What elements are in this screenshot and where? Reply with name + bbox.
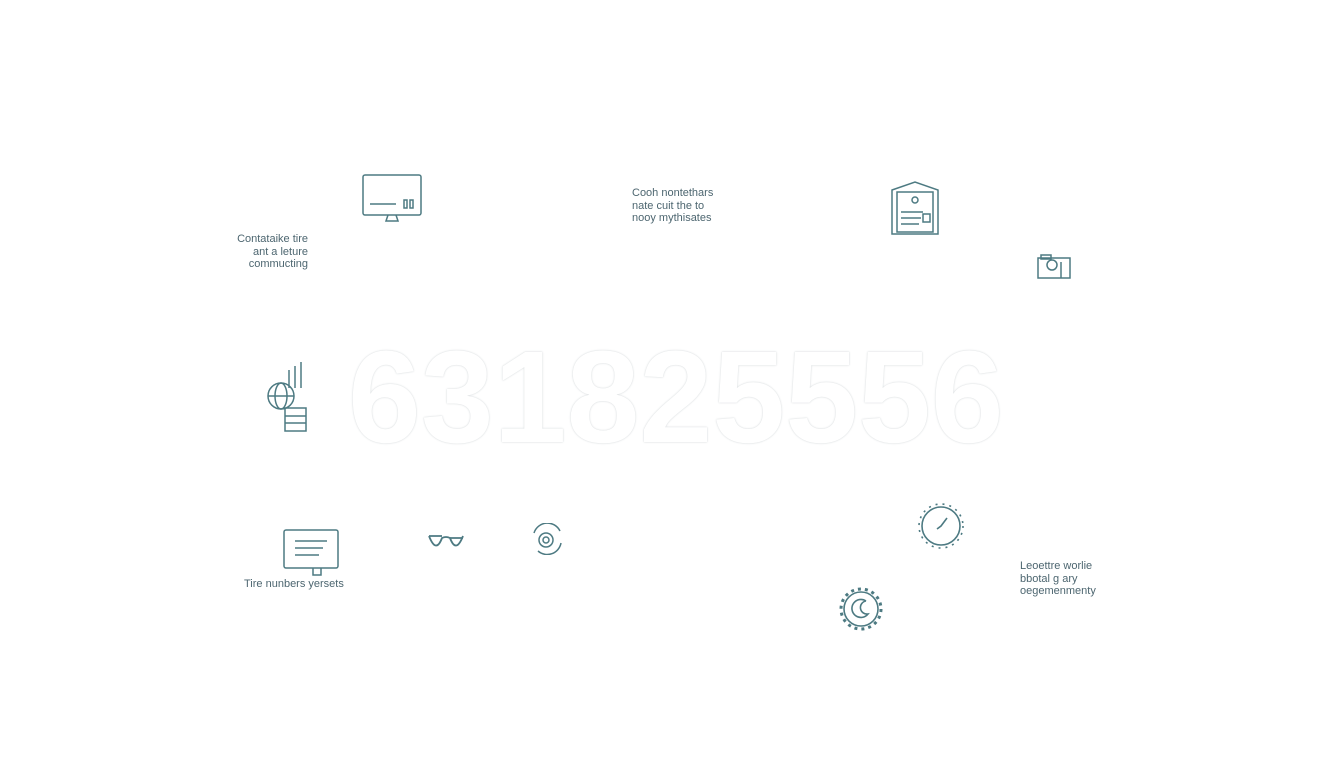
text: bottom left: Tire nunbers yersets <box>244 578 344 590</box>
icon: gear <box>840 588 882 630</box>
text: top center: nooy mythisates <box>632 212 711 224</box>
icon: globe with bars <box>267 362 307 432</box>
text: bottom right: Leoettre worlie <box>1020 560 1092 572</box>
icon: chat box <box>283 529 339 576</box>
icon: document <box>891 181 939 235</box>
text: top left <box>237 233 308 270</box>
text: top center: nate cuit the to <box>632 200 704 212</box>
big number: 631825556 <box>348 323 1004 470</box>
icon: small camera box <box>1037 254 1071 279</box>
text: top left: Contataike tire <box>237 233 308 245</box>
icon: clock <box>918 503 964 549</box>
text: top left: ant a leture <box>253 246 308 258</box>
text: bottom right: bbotal g ary <box>1020 572 1077 584</box>
icon: glasses <box>428 535 464 546</box>
text: bottom right <box>1020 560 1096 597</box>
text: top left: commucting <box>249 258 308 270</box>
icon: target <box>533 523 562 555</box>
text: top center <box>632 187 713 224</box>
text: top center: Cooh nontethars <box>632 187 713 199</box>
text: bottom right: oegemenmenty <box>1020 585 1096 597</box>
icon: monitor <box>362 174 422 222</box>
